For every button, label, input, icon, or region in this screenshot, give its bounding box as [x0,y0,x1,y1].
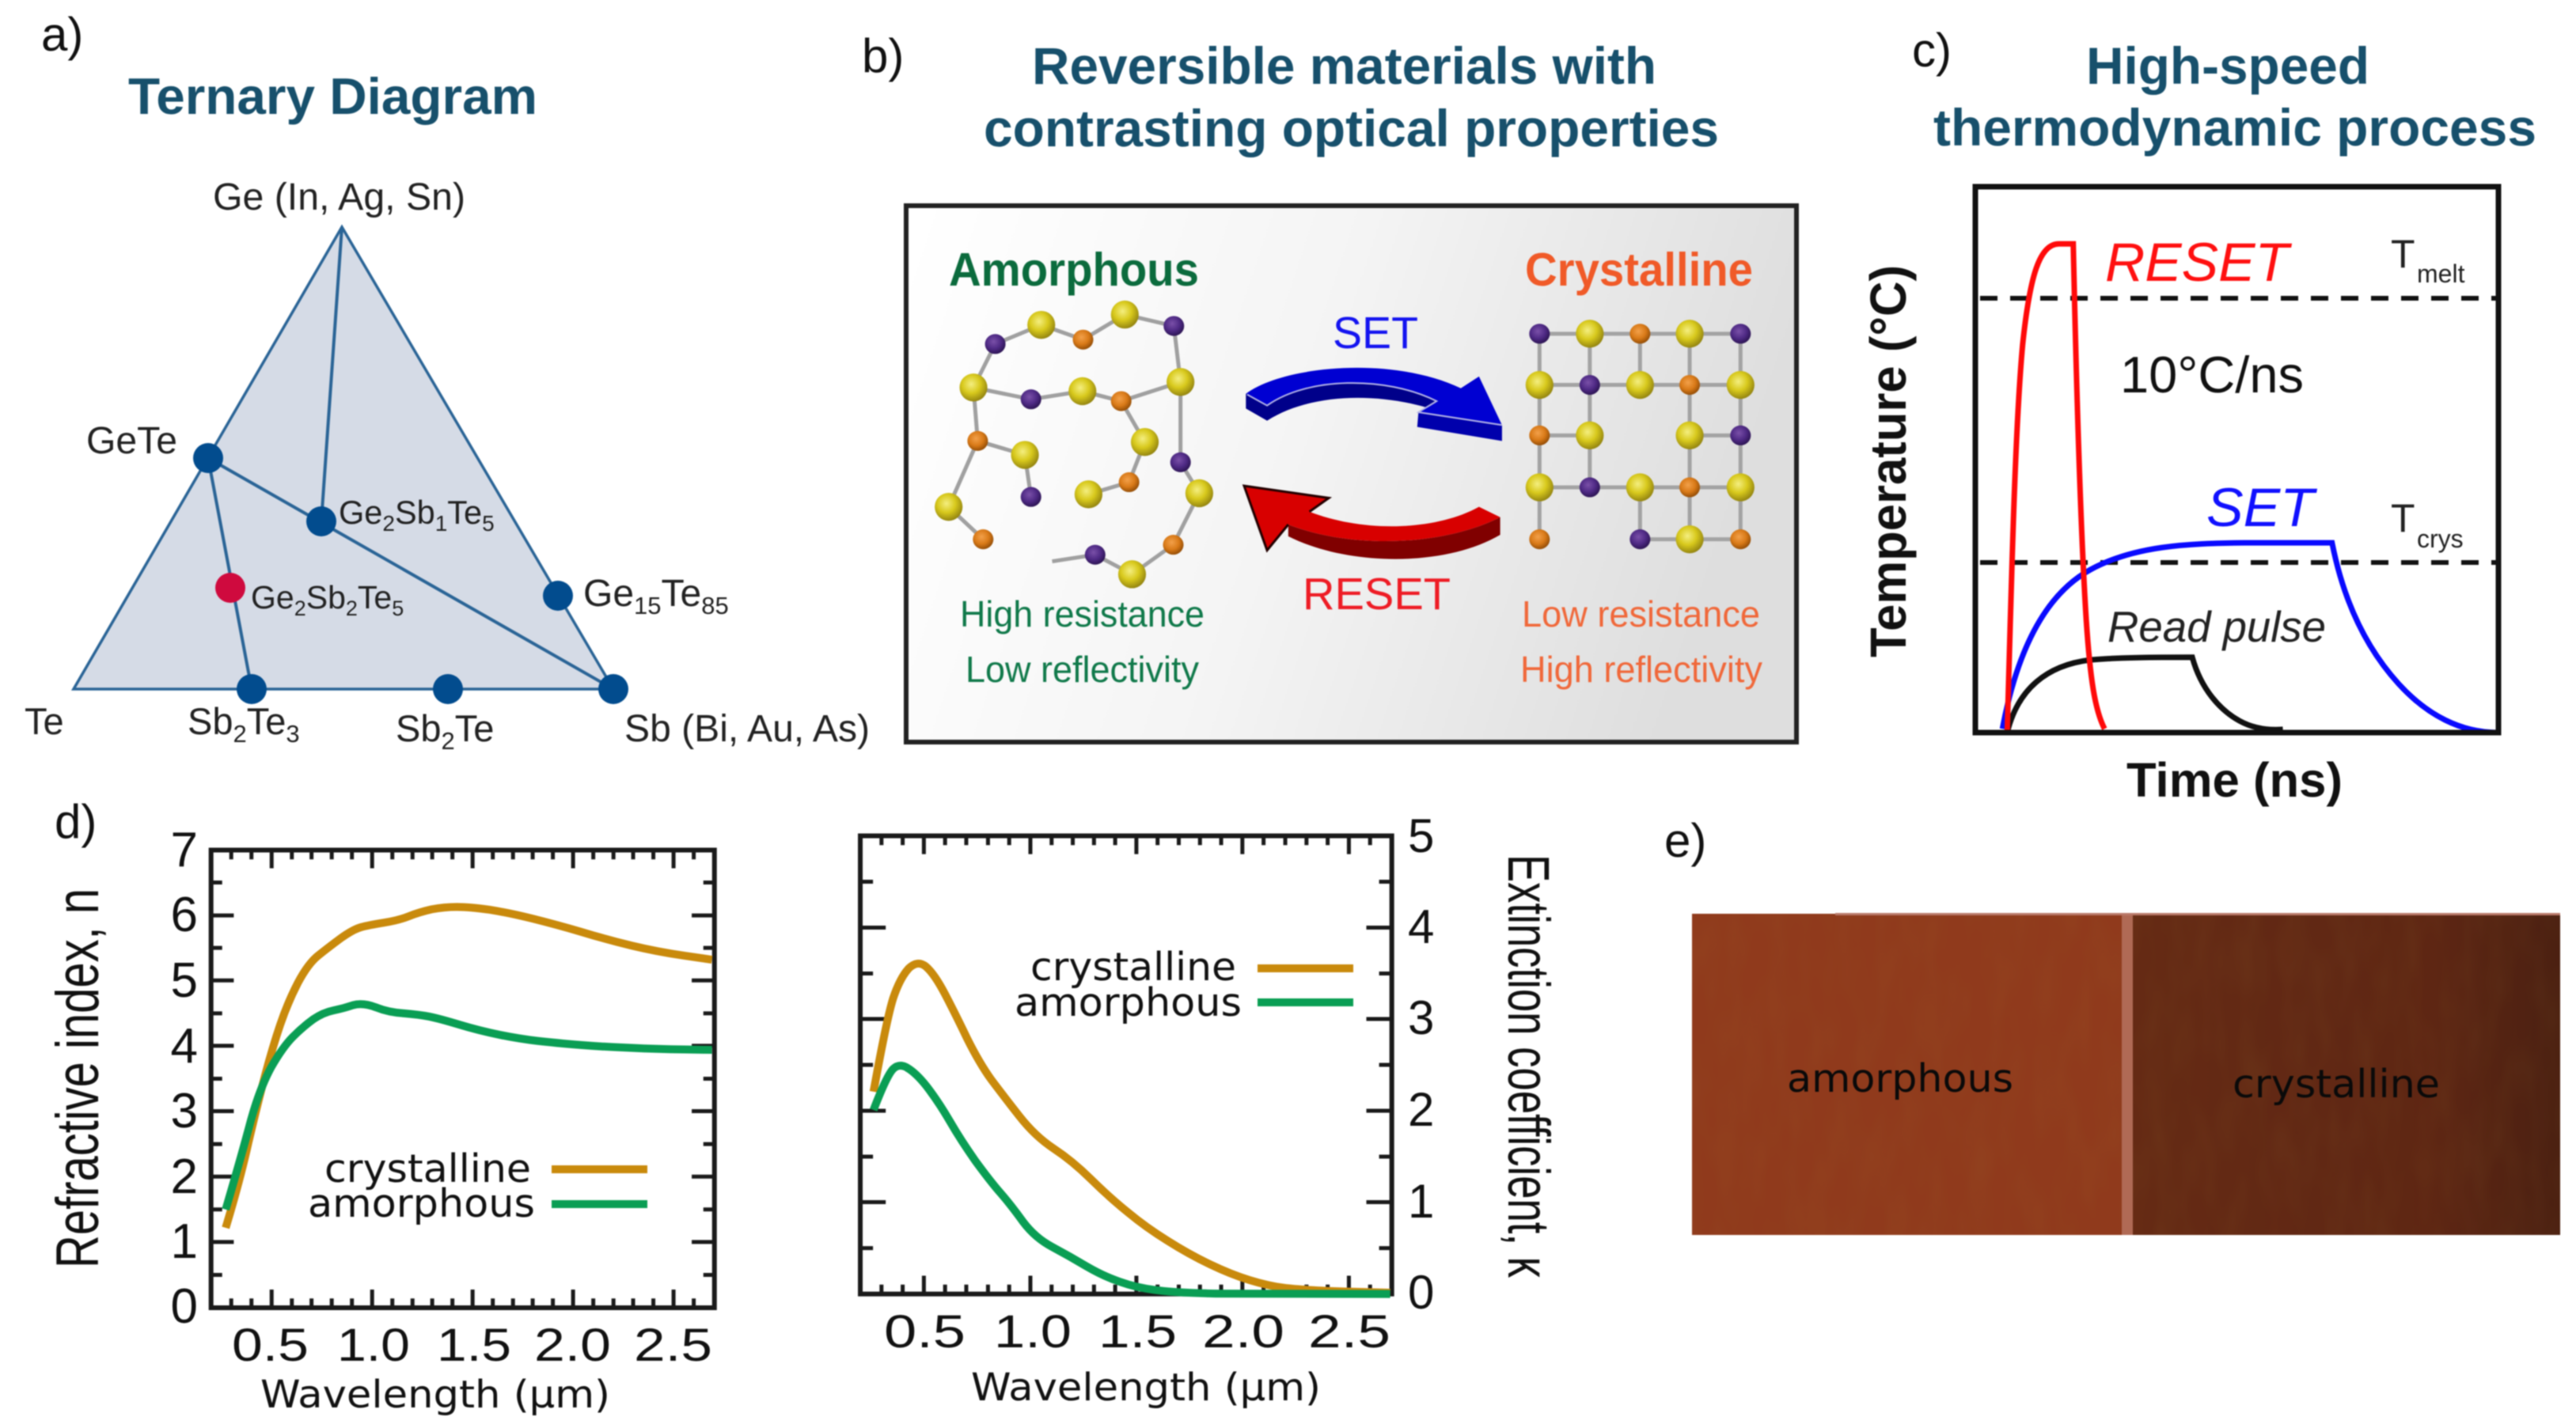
amorphous atomic network [935,301,1213,589]
arrow: RESET red [1244,486,1500,559]
T crys dashed line [1980,560,2497,565]
panel label c: c) [1912,24,1952,77]
label: Ge15Te85: 15 [634,592,662,619]
x axis label: Wavelength (μm) [971,1366,1321,1410]
amorphous properties: Low reflectivity [966,649,1199,690]
label: T melt: melt [2417,259,2465,288]
y tick labels: 0 [171,1279,198,1334]
panel e: photo of amorphous and crystalline regions [1664,814,2560,1235]
panel b: reversible materials [862,29,1796,742]
label: Ge15Te85: Ge [583,573,634,615]
x tick labels: 2.0 [1202,1306,1284,1358]
heading: Ternary Diagram: Ternary Diagram [128,67,537,125]
y tick labels: 1 [171,1214,198,1269]
x tick labels: 2.0 [534,1320,611,1371]
x tick labels [884,1306,1390,1358]
amorphous region [1692,914,2123,1235]
y tick labels: 4 [171,1019,198,1074]
label: Ge2Sb1Te5: Ge [339,494,382,531]
y tick labels: 0 [1408,1266,1434,1319]
y tick labels: 2 [1408,1083,1434,1136]
label: SET: SET [1333,308,1418,358]
x tick labels: 1.0 [337,1320,410,1371]
y tick labels [171,823,198,1334]
red dot: Ge2Sb2Te5 [215,573,245,603]
legend: crystalline [1030,945,1236,990]
ternary triangle [74,227,613,689]
y tick labels: 5 [171,953,198,1008]
x tick labels [232,1320,712,1371]
label: Ge2Sb2Te5: Sb [306,579,346,616]
x axis label: Wavelength (μm) [260,1373,610,1417]
schematic box [906,206,1796,742]
panel label a: a) [41,8,83,61]
y tick labels: 7 [171,823,198,877]
curve: crystalline k [874,964,1390,1293]
legend: amorphous [308,1181,535,1226]
x tick labels: 2.5 [1308,1306,1390,1358]
label: Ge2Sb1Te5: 1 [435,511,447,536]
label: Ge15Te85: 85 [701,592,729,619]
x axis label: Time: Time (ns) [2126,753,2343,807]
heading: Amorphous: Amorphous [949,244,1199,296]
amorphous properties: High resistance [960,593,1205,634]
label: Sb2Te3: 3 [286,720,300,748]
y tick labels: 5 [1408,809,1434,862]
y tick labels: 1 [1408,1175,1434,1228]
panel label e: e) [1664,814,1706,867]
label: Ge2Sb2Te5: Ge [251,579,294,616]
tie lines [208,227,613,689]
crystalline properties: Low resistance [1522,593,1760,634]
label: Sb2Te3: Te [247,700,286,742]
plot frame [1975,187,2498,733]
y axis label: refractive index: Refractive index, n [44,888,112,1268]
label: RESET: RESET [2105,232,2293,293]
x tick labels: 1.5 [437,1320,511,1371]
label: Ge2Sb2Te5: 2 [294,597,306,620]
x tick labels: 1.5 [1098,1306,1177,1358]
curve: read pulse [2007,657,2283,733]
arrow: SET blue [1246,368,1502,441]
label: T crys: crys [2417,525,2464,553]
label: Sb2Te: Sb [396,707,442,749]
divider strip [2122,914,2133,1235]
panel a: ternary diagram [25,8,870,755]
T melt dashed line [1980,296,2497,301]
label: GeTe: GeTe [86,420,177,462]
x tick labels: 0.5 [884,1306,966,1358]
legend [1015,945,1353,1025]
curve: amorphous n [226,1004,712,1210]
heading: thermodynamic process: thermodynamic process [1933,98,2536,157]
label: Ge2Sb1Te5: Sb [395,494,435,531]
chart: extinction coefficient [860,809,1561,1410]
label: T crys: T [2391,496,2415,540]
heading: thermodynamic process: High-speed [2086,36,2369,95]
texture overlay [1692,914,2560,1235]
panel d: optical constants [44,795,1561,1417]
vertex label: Ge: Ge (In, Ag, Sn) [213,176,465,218]
label: Ge2Sb1Te5: Te [447,494,482,531]
amorphous properties [960,593,1205,690]
legend [308,1146,647,1226]
x tick labels: 2.5 [634,1320,712,1371]
heading: reversible materials: Reversible materials with [1032,36,1656,95]
legend: crystalline [324,1146,531,1191]
label: Sb2Te: 2 [442,727,455,755]
y tick labels: 3 [171,1084,198,1138]
heading: thermodynamic process [1933,36,2536,157]
label: Sb2Te: Te [455,707,494,749]
label: Read pulse: Read pulse [2107,602,2326,651]
curve: amorphous k [874,1066,1390,1294]
chart: refractive index [44,823,715,1417]
heading: reversible materials [984,36,1719,157]
composition dots [193,443,628,704]
y tick labels: 6 [171,888,198,942]
label: crystalline: crystalline [2233,1062,2440,1107]
label: SET: SET [2206,477,2318,538]
label: Ge2Sb2Te5: 2 [346,597,358,620]
crystalline properties: High reflectivity [1520,649,1762,690]
label: Ge15Te85: Te [662,573,701,615]
crystalline atomic lattice [1526,320,1755,553]
legend: amorphous [1015,980,1242,1025]
label: RESET: RESET [1303,569,1451,619]
crystalline region [2132,914,2560,1235]
label: Sb2Te3: 2 [233,720,247,748]
panel c: thermodynamic process [1860,24,2536,807]
heading: Crystalline: Crystalline [1525,244,1753,296]
vertex label: Sb: Sb (Bi, Au, As) [624,708,870,750]
x tick labels: 1.0 [994,1306,1072,1358]
label: amorphous: amorphous [1787,1056,2013,1101]
y tick labels [1408,809,1434,1319]
curve: RESET [2007,244,2104,733]
label: rate: 10°C/ns [2120,346,2304,403]
label: Ge2Sb1Te5: 5 [482,511,495,536]
label: Ge2Sb1Te5: 2 [382,511,395,536]
thermal pulse chart [1975,187,2498,733]
x tick labels: 0.5 [232,1320,309,1371]
label: Ge2Sb2Te5: 5 [392,597,404,620]
label: Ge2Sb2Te5: Te [358,579,392,616]
y tick labels: 4 [1408,900,1434,953]
y tick labels: 2 [171,1150,198,1204]
panel label d: d) [55,795,97,848]
panel label b: b) [862,29,904,82]
y tick labels: 3 [1408,991,1434,1044]
label: Sb2Te3: Sb [188,700,233,742]
label: T melt: T [2391,232,2415,276]
crystalline properties [1520,593,1762,690]
vertex label: Te: Te [25,700,64,742]
top edge highlight [1835,913,2560,915]
curve: crystalline n [226,907,712,1228]
curve: SET [2002,543,2498,733]
heading: reversible materials: contrasting optical properties [984,99,1719,157]
plot axes [211,850,715,1308]
y axis label: Temperature: Temperature (°C) [1860,265,1917,657]
plot axes [860,835,1392,1294]
